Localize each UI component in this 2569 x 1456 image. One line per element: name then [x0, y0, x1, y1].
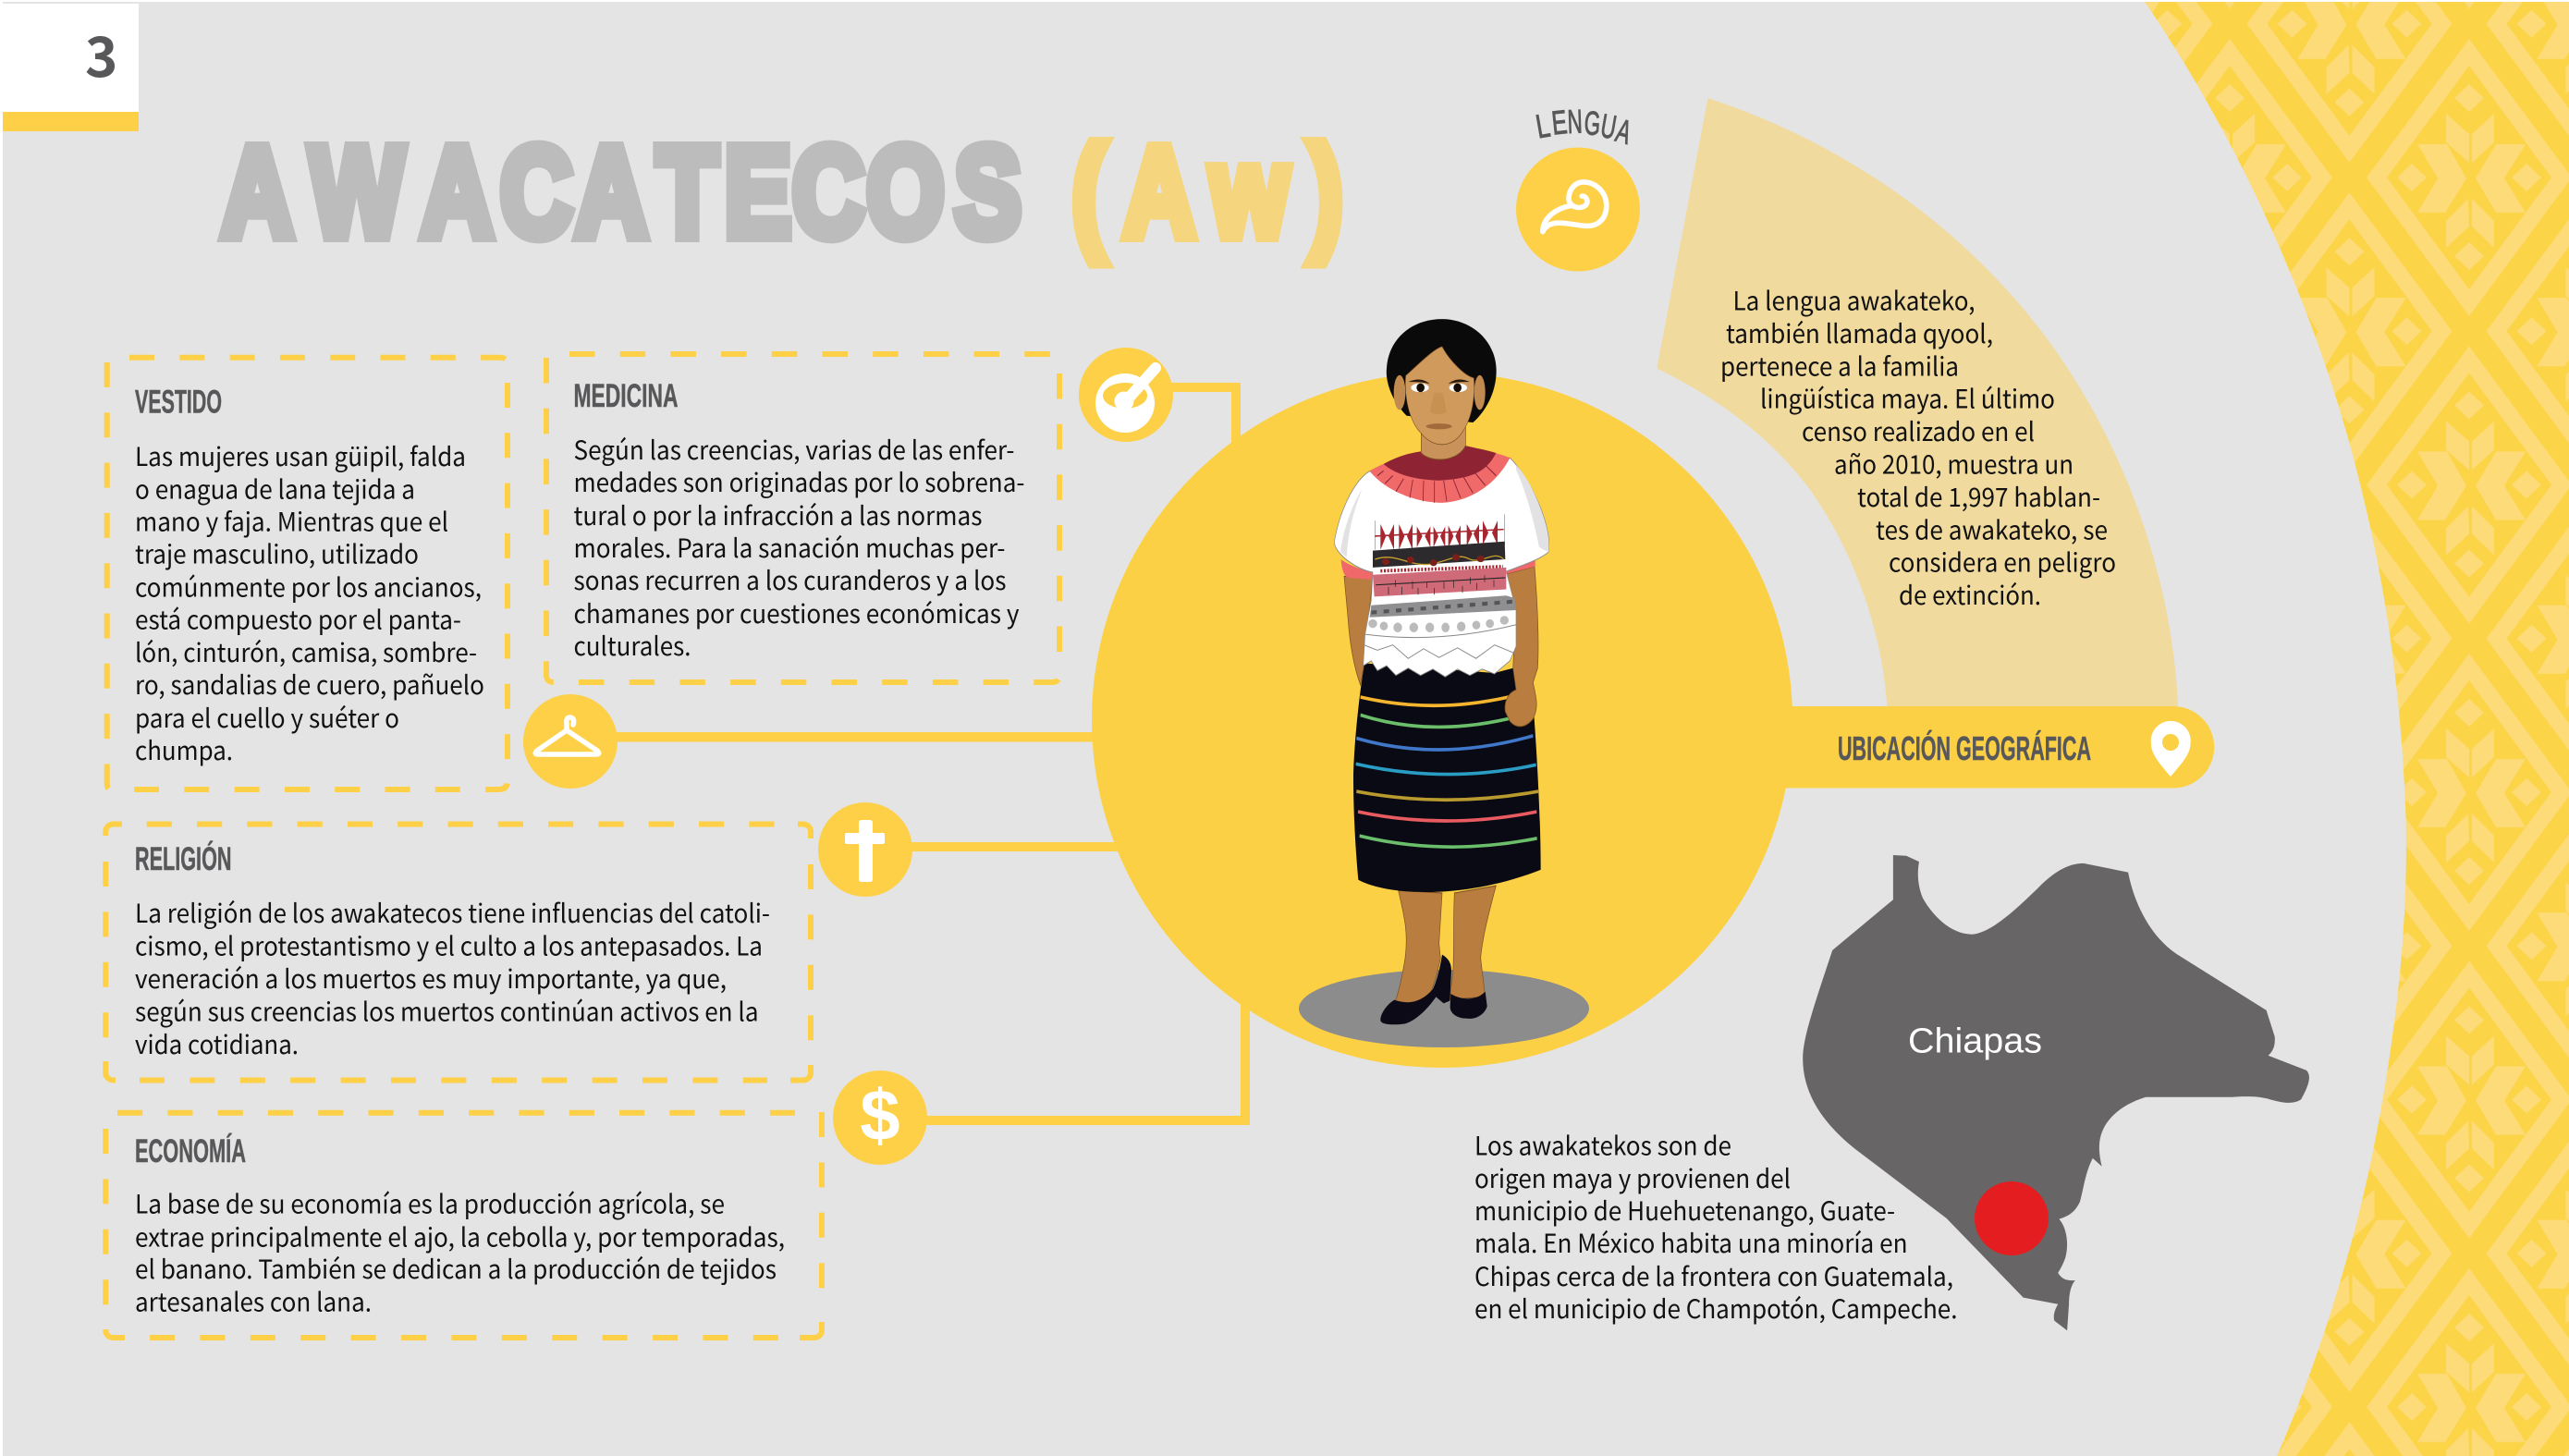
language text: lingüística maya. El último [1760, 380, 2055, 417]
main yellow circle [1092, 373, 1792, 1068]
icon: cross [818, 802, 912, 897]
panel: medicina [546, 354, 1059, 682]
language text: considera en peligro [1889, 544, 2116, 581]
panel: economia: La base de su economía es la producción agrícola, se [135, 1185, 725, 1222]
location text [1474, 1126, 1958, 1327]
title: (Aw) [1072, 121, 1342, 263]
ground shadow [1299, 970, 1589, 1047]
panel: medicina: sonas recurren a los curanderos y a los [573, 561, 1006, 598]
location text: origen maya y provienen del [1474, 1159, 1791, 1196]
language text: tes de awakateko, se [1876, 510, 2108, 547]
icon: dollar [833, 1071, 927, 1165]
panel: vestido: Las mujeres usan güipil, falda [135, 437, 466, 474]
location text: Los awakatekos son de [1474, 1126, 1731, 1163]
panel: vestido: traje masculino, utilizado [135, 534, 419, 571]
location text: en el municipio de Champotón, Campeche. [1474, 1290, 1958, 1327]
location banner [1756, 706, 2214, 788]
panel: religion: vida cotidiana. [135, 1025, 299, 1062]
panel: vestido: ro, sandalias de cuero, pañuelo [135, 666, 484, 703]
page number tab: 3 [85, 13, 117, 93]
panel: vestido: VESTIDO [135, 385, 222, 421]
panel: religion: La religión de los awakatecos tiene influencias del catoli- [135, 894, 770, 931]
facial features [1408, 380, 1470, 429]
location text: mala. En México habita una minoría en [1474, 1224, 1908, 1261]
panel: vestido: está compuesto por el panta- [135, 601, 461, 638]
panel: vestido: chumpa. [135, 731, 233, 768]
panel: religion: según sus creencias los muertos continúan activos en la [135, 992, 758, 1029]
panel: religion: RELIGIÓN [135, 840, 231, 877]
language sector [1657, 98, 2178, 706]
illustration: woman in traditional dress [1299, 319, 1589, 1047]
icon: hanger [523, 694, 618, 789]
panel: medicina: morales. Para la sanación muchas per- [573, 529, 1006, 566]
panel: vestido: para el cuello y suéter o [135, 699, 399, 736]
language text: La lengua awakateko, [1732, 281, 1975, 318]
language label: N [1567, 104, 1583, 141]
shoes [1380, 955, 1487, 1024]
ears [1394, 375, 1486, 410]
panel: economia: extrae principalmente el ajo, la cebolla y, por temporadas, [135, 1218, 785, 1255]
hair [1387, 319, 1497, 422]
panel: vestido [107, 358, 508, 789]
panel: vestido: comúnmente por los ancianos, [135, 568, 482, 605]
language text: año 2010, muestra un [1834, 446, 2074, 483]
panel: economia: ECONOMÍA [135, 1132, 246, 1169]
language icon [1516, 148, 1640, 272]
collar [1370, 446, 1510, 503]
panel: medicina: chamanes por cuestiones económicas y [573, 594, 1020, 631]
arms [1344, 567, 1538, 727]
panel: vestido: lón, cinturón, camisa, sombre- [135, 633, 477, 670]
icon: dollar: $ [860, 1074, 900, 1156]
language label: L [1533, 106, 1553, 145]
sleeve cuffs [1341, 557, 1535, 580]
language label: U [1598, 108, 1619, 147]
legs [1394, 886, 1496, 1007]
language label: A [1612, 113, 1635, 152]
language label [1533, 103, 1635, 152]
map location marker [1975, 1181, 2049, 1255]
location banner: UBICACIÓN GEOGRÁFICA [1838, 728, 2091, 767]
panel: medicina: culturales. [573, 627, 691, 664]
language text: de extinción. [1899, 576, 2041, 613]
map label: Chiapas [1908, 1022, 2042, 1061]
decorative woven pattern band [2145, 2, 2569, 1456]
language text [1720, 281, 2116, 613]
language text: total de 1,997 hablan- [1857, 478, 2100, 515]
page number tab [3, 4, 139, 131]
panel: religion: veneración a los muertos es muy importante, ya que, [135, 960, 727, 997]
location text: municipio de Huehuetenango, Guate- [1474, 1192, 1895, 1229]
skirt stripes [1356, 697, 1538, 847]
language text: también llamada qyool, [1726, 314, 1993, 351]
title: AWACATECOS [221, 121, 1021, 263]
language text: pertenece a la familia [1720, 347, 1959, 384]
icon: mortar and pestle [1079, 348, 1173, 442]
skirt [1353, 663, 1541, 892]
panel: vestido: mano y faja. Mientras que el [135, 503, 448, 540]
panel: vestido: o enagua de lana tejida a [135, 470, 415, 507]
language label: G [1583, 105, 1601, 143]
panel: medicina: Según las creencias, varias de las enfer- [573, 431, 1015, 468]
face [1405, 347, 1474, 445]
panel: economia: el banano. También se dedican a la producción de tejidos [135, 1250, 777, 1287]
panel: medicina: medades son originadas por lo sobrena- [573, 463, 1024, 500]
neck [1421, 426, 1465, 459]
panel: religion: cismo, el protestantismo y el culto a los antepasados. La [135, 926, 763, 963]
panel: economia [105, 1112, 822, 1338]
map: Chiapas [1803, 855, 2309, 1330]
blouse embroidery [1340, 465, 1548, 658]
language text: censo realizado en el [1802, 412, 2035, 449]
icon: location pin [2151, 721, 2191, 777]
blouse [1334, 458, 1549, 677]
language label: E [1550, 103, 1569, 142]
panel: religion [105, 824, 811, 1080]
connector lines [610, 383, 1250, 1125]
panel: economia: artesanales con lana. [135, 1283, 372, 1320]
panel: medicina: tural o por la infracción a las normas [573, 496, 982, 533]
panel: medicina: MEDICINA [573, 378, 679, 414]
location text: Chipas cerca de la frontera con Guatemala, [1474, 1257, 1953, 1294]
